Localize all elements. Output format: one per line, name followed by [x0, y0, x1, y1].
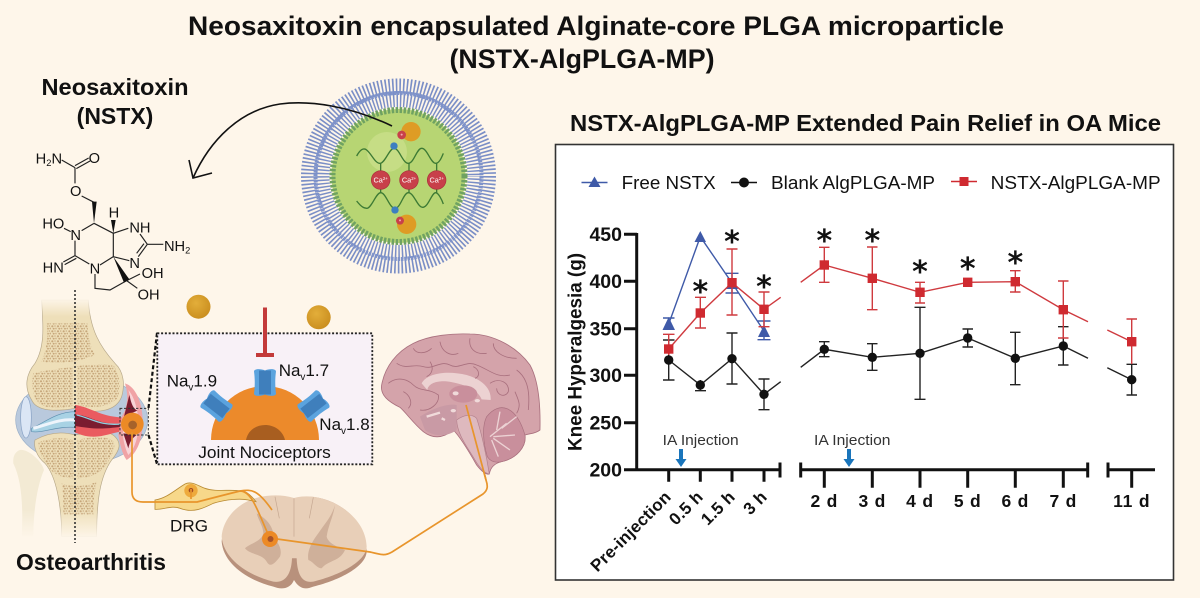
particle core	[332, 109, 466, 243]
legend: blank particle: Blank AlgPLGA-MP	[771, 172, 935, 193]
alginate network with calcium ions	[357, 122, 446, 234]
chemical structure: neosaxitoxin: N	[129, 256, 140, 272]
heading: chart title: NSTX-AlgPLGA-MP Extended Pain Relief in OA Mice	[570, 110, 1161, 136]
brain	[381, 334, 540, 474]
knee joint	[10, 298, 148, 538]
channel: nav 1.8	[296, 389, 331, 423]
channel: nav 1.9	[199, 389, 234, 423]
legend: nstx particle: NSTX-AlgPLGA-MP	[991, 172, 1161, 193]
y axis label: Knee Hyperalgesia (g)	[564, 253, 586, 451]
label: nav 1.7: 1.7	[305, 361, 329, 380]
significance stars: *	[816, 224, 832, 259]
thalamus	[449, 385, 477, 403]
heading: neosaxitoxin: (NSTX)	[77, 103, 153, 129]
icon: neosaxitoxin ball left	[186, 295, 210, 319]
x axis labels: 0.5 h	[665, 487, 707, 529]
alginate network with calcium ions: Ca	[373, 176, 383, 185]
y axis	[589, 224, 637, 482]
chemical structure: neosaxitoxin: OH	[138, 288, 160, 304]
chemical structure: neosaxitoxin: HN	[43, 261, 64, 277]
alginate network with calcium ions: 2+	[439, 176, 444, 181]
significance stars: *	[960, 252, 976, 287]
chemical structure: neosaxitoxin: H	[36, 151, 46, 167]
series: blank particle	[663, 307, 1137, 410]
x axis labels: 1.5 h	[697, 487, 739, 529]
nerve pathway	[132, 398, 487, 555]
annotation: ia injection first	[663, 433, 739, 467]
label: joint nociceptors: Joint Nociceptors	[198, 443, 331, 462]
significance stars: *	[692, 275, 708, 310]
x axis labels: 6 d	[1001, 491, 1029, 511]
significance stars: *	[756, 270, 772, 305]
cerebellum	[484, 408, 525, 462]
title: (NSTX-AlgPLGA-MP)	[450, 44, 714, 74]
fade ends	[33, 298, 97, 317]
meniscus	[21, 397, 31, 438]
chemical structure: neosaxitoxin: NH	[129, 221, 150, 237]
chemical structure: neosaxitoxin: 2	[185, 246, 190, 256]
nucleus	[246, 425, 285, 440]
corpus callosum	[422, 373, 491, 400]
x axis labels: Pre-injection	[587, 487, 675, 575]
chemical structure: neosaxitoxin: H	[109, 206, 119, 222]
diencephalon floor	[420, 405, 457, 435]
fibula	[13, 450, 44, 537]
legend: free nstx	[582, 172, 716, 193]
drg ganglion	[155, 483, 256, 510]
nociceptor dome	[211, 386, 319, 440]
callout guide lines	[148, 333, 157, 464]
annotation: ia injection first: IA Injection	[663, 433, 739, 449]
title: Neosaxitoxin encapsulated Alginate-core PLGA microparticle	[188, 11, 1004, 41]
inhibition symbol	[256, 308, 274, 355]
chemical structure: neosaxitoxin	[36, 151, 190, 304]
significance stars: *	[724, 225, 740, 260]
y axis: 350	[589, 318, 622, 340]
x axis labels: 3 h	[740, 487, 771, 519]
y axis: 450	[589, 224, 622, 246]
label: nav 1.9: v	[188, 382, 193, 394]
lipid shell	[308, 86, 488, 266]
spinal cord	[222, 495, 367, 588]
icon: neosaxitoxin ball right	[307, 305, 331, 329]
label: drg: DRG	[170, 518, 208, 536]
alginate network with calcium ions: 2+	[383, 176, 388, 181]
panel: chart frame	[556, 144, 1174, 580]
tibia	[35, 432, 119, 537]
series: free nstx	[662, 231, 770, 340]
panel: joint nociceptors	[157, 333, 372, 464]
inflamed cartilage	[75, 405, 122, 437]
chart: knee hyperalgesia	[564, 224, 1155, 575]
label: nav 1.7: Na	[279, 361, 300, 380]
label: nav 1.8: 1.8	[346, 415, 370, 434]
x axis labels: 5 d	[954, 491, 982, 511]
label: nav 1.8: Na	[319, 415, 341, 434]
annotation: ia injection second: IA Injection	[814, 433, 890, 449]
x axis labels: 7 d	[1049, 491, 1077, 511]
legend	[582, 172, 1161, 193]
chemical structure: neosaxitoxin: O	[89, 151, 100, 167]
legend: free nstx: Free NSTX	[622, 172, 716, 193]
x axis labels: 2 d	[810, 491, 838, 511]
label: osteoarthritis: Osteoarthritis	[16, 549, 166, 575]
x axis labels: 4 d	[906, 491, 934, 511]
arrow: particle to molecule	[189, 103, 392, 178]
chemical structure: neosaxitoxin: N	[90, 261, 100, 277]
channel: nav 1.7	[254, 369, 276, 396]
title	[188, 11, 1004, 74]
y axis: 300	[589, 365, 622, 387]
x axis segments	[624, 462, 1155, 488]
chemical structure: neosaxitoxin: N	[51, 151, 62, 167]
brain nerve terminal	[466, 405, 486, 480]
sulci	[388, 338, 529, 413]
label: nav 1.7: v	[300, 372, 305, 383]
alginate network with calcium ions: 2+	[411, 176, 417, 181]
midline dotted line	[74, 290, 76, 543]
alginate network with calcium ions: Ca	[402, 176, 411, 185]
chemical structure: neosaxitoxin: NH	[164, 239, 185, 255]
significance stars	[692, 224, 1023, 310]
y axis: 250	[589, 412, 622, 434]
significance stars: *	[864, 224, 880, 259]
series: nstx particle	[663, 247, 1137, 364]
heading: neosaxitoxin	[42, 74, 188, 129]
x axis labels	[587, 487, 1150, 575]
chemical structure: neosaxitoxin: HO	[42, 217, 64, 233]
label: nav 1.9: 1.9	[193, 372, 217, 390]
chemical structure: neosaxitoxin: N	[70, 228, 81, 244]
x axis labels: 11 d	[1113, 491, 1150, 511]
inflamed synovium	[118, 383, 143, 460]
annotation: ia injection second	[814, 433, 890, 467]
significance stars: *	[1007, 246, 1023, 281]
y axis: 400	[589, 271, 622, 293]
femur	[27, 300, 123, 411]
nociceptor	[121, 413, 144, 435]
y axis: 200	[589, 460, 622, 482]
healthy cartilage	[32, 412, 75, 432]
chemical structure: neosaxitoxin: OH	[142, 266, 164, 282]
label: nav 1.8: v	[341, 426, 346, 437]
heading: neosaxitoxin: Neosaxitoxin	[42, 74, 188, 100]
spinal neuron	[262, 531, 278, 547]
label: nav 1.9: Na	[167, 372, 188, 390]
brainstem	[457, 415, 489, 474]
zoom box	[120, 408, 148, 435]
alginate network with calcium ions: Ca	[429, 176, 439, 185]
microparticle	[308, 86, 488, 266]
joint capsule	[16, 376, 148, 464]
chemical structure: neosaxitoxin: O	[70, 184, 81, 200]
x axis labels: 3 d	[858, 491, 886, 511]
chemical structure: neosaxitoxin: 2	[46, 158, 51, 168]
significance stars: *	[912, 255, 928, 290]
